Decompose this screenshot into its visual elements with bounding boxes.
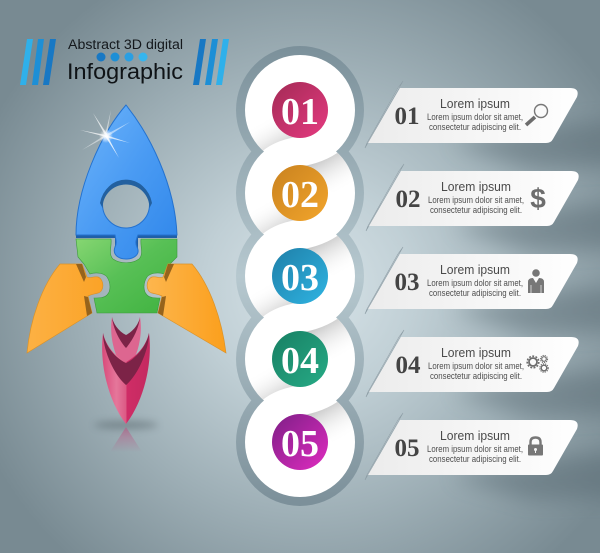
badge 04	[272, 331, 328, 387]
badge 05: 05	[281, 423, 319, 465]
icon: dollar: $	[530, 183, 546, 214]
panel 04: 04	[396, 352, 421, 379]
panel 03: Lorem ipsum	[440, 263, 510, 277]
nose hole inner wall	[100, 180, 152, 208]
panel 03: consectetur adipiscing elit.	[429, 288, 521, 298]
white ribbon	[245, 55, 355, 497]
outer ring	[236, 46, 364, 506]
rocket illustration	[27, 105, 226, 452]
panel 02: Lorem ipsum dolor sit amet,	[428, 195, 524, 205]
blue nose	[76, 105, 177, 259]
title line: Infographic: Infographic	[67, 59, 183, 84]
header: title block	[20, 37, 229, 85]
badge 01	[272, 82, 328, 138]
icon: businessman	[528, 269, 544, 293]
right fin	[147, 264, 226, 353]
panel 02	[366, 164, 600, 251]
flame	[102, 317, 150, 424]
rocket ground shadow	[94, 421, 158, 429]
panel 05: Lorem ipsum	[440, 429, 510, 443]
panel 05: 05	[394, 435, 420, 462]
panel 04: Lorem ipsum	[441, 346, 511, 360]
icon: padlock	[528, 438, 543, 456]
panel 02: Lorem ipsum	[441, 180, 511, 194]
panel 01: Lorem ipsum	[440, 97, 510, 111]
icon: gears	[527, 355, 548, 372]
panel 02: consectetur adipiscing elit.	[430, 205, 522, 215]
panel 03: 03	[394, 269, 420, 296]
badge 03: 03	[281, 257, 319, 299]
rocket reflection	[110, 427, 142, 452]
sparkle	[80, 110, 130, 158]
panel 05	[365, 413, 600, 500]
right blue stripes	[193, 39, 229, 85]
panel 02: 02	[396, 186, 420, 213]
left fin	[27, 264, 103, 353]
panel 01	[365, 81, 600, 168]
badge 02: 02	[281, 174, 319, 216]
panel 03	[365, 247, 600, 334]
badge 03	[272, 248, 328, 304]
panel 05: consectetur adipiscing elit.	[429, 454, 521, 464]
chain of numbered circles	[236, 46, 364, 506]
ribbon fold shadows	[255, 128, 349, 432]
panel 01: consectetur adipiscing elit.	[429, 122, 521, 132]
badge 01: 01	[281, 91, 319, 133]
badge 04: 04	[281, 340, 319, 382]
title line: Abstract 3D digital: Abstract 3D digital	[68, 37, 183, 52]
panel 05: Lorem ipsum dolor sit amet,	[427, 444, 523, 454]
green puzzle body	[76, 239, 177, 313]
panel 04	[366, 330, 600, 417]
left blue stripes	[20, 39, 56, 85]
dots row	[96, 52, 148, 62]
panel 03: Lorem ipsum dolor sit amet,	[427, 278, 523, 288]
icon: magnifier	[526, 104, 548, 125]
badge 02	[272, 165, 328, 221]
panel 01: 01	[394, 103, 420, 130]
panel 04: Lorem ipsum dolor sit amet,	[428, 361, 524, 371]
badge 05	[272, 414, 328, 470]
panel 04: consectetur adipiscing elit.	[430, 371, 522, 381]
panel 01: Lorem ipsum dolor sit amet,	[427, 112, 523, 122]
